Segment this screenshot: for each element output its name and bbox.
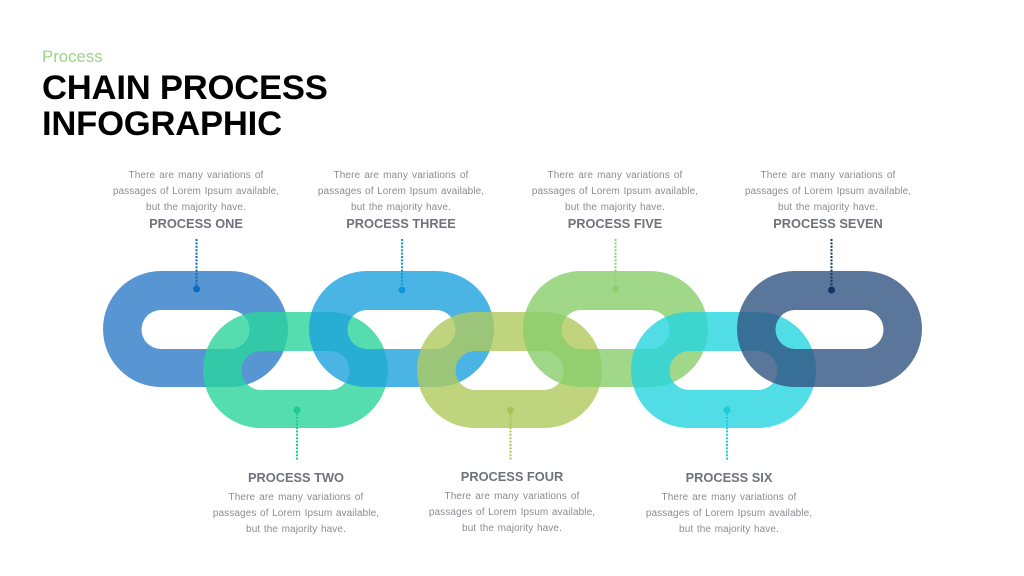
text: process seven — [745, 170, 911, 231]
text: process six: There are many variations of — [662, 492, 796, 503]
text: process three: passages of Lorem Ipsum available, — [318, 186, 484, 197]
text: process seven: PROCESS SEVEN — [773, 216, 883, 231]
text: process two: There are many variations of — [229, 492, 363, 503]
link 2 — [203, 312, 388, 428]
text: process one: There are many variations of — [129, 170, 263, 181]
link 1 — [103, 271, 288, 387]
text: process two: but the majority have. — [246, 524, 346, 535]
text: process six: PROCESS SIX — [686, 470, 772, 485]
title: INFOGRAPHIC — [42, 105, 282, 143]
text: process three: but the majority have. — [351, 202, 451, 213]
text: process one: passages of Lorem Ipsum available, — [113, 186, 279, 197]
connector 4 — [507, 406, 514, 460]
text: process two — [213, 470, 379, 535]
text: process one: PROCESS ONE — [149, 216, 243, 231]
text: process two: PROCESS TWO — [248, 470, 344, 485]
text: process five: but the majority have. — [565, 202, 665, 213]
title — [42, 69, 328, 143]
text: process four: PROCESS FOUR — [461, 469, 563, 484]
text: process three — [318, 170, 484, 231]
text: process six: passages of Lorem Ipsum available, — [646, 508, 812, 519]
text: process seven: There are many variations of — [761, 170, 895, 181]
text: process one: but the majority have. — [146, 202, 246, 213]
link 3 — [309, 271, 494, 387]
text: process one — [113, 170, 279, 231]
text: process six — [646, 470, 812, 535]
text: process seven: but the majority have. — [778, 202, 878, 213]
text: process two: passages of Lorem Ipsum available, — [213, 508, 379, 519]
link 5 — [523, 271, 708, 387]
text: process four — [429, 469, 595, 534]
text: process six: but the majority have. — [679, 524, 779, 535]
text: process five: passages of Lorem Ipsum available, — [532, 186, 698, 197]
text: process five: There are many variations of — [548, 170, 682, 181]
connector 5 — [612, 239, 619, 292]
title: CHAIN PROCESS — [42, 69, 328, 107]
text: process four: passages of Lorem Ipsum available, — [429, 507, 595, 518]
connector 1 — [193, 239, 200, 292]
text: process five: PROCESS FIVE — [568, 216, 662, 231]
link 4 — [417, 312, 602, 428]
text: process three: There are many variations of — [334, 170, 468, 181]
text: process five — [532, 170, 698, 231]
eyebrow: Process: Process — [42, 47, 103, 66]
text: process three: PROCESS THREE — [346, 216, 456, 231]
connector 6 — [724, 406, 730, 460]
connector 3 — [398, 239, 406, 294]
link 6 — [631, 312, 816, 428]
text: process four: There are many variations of — [445, 491, 579, 502]
connector 7 — [828, 239, 835, 294]
text: process seven: passages of Lorem Ipsum available, — [745, 186, 911, 197]
text: process four: but the majority have. — [462, 523, 562, 534]
link 7 — [737, 271, 922, 387]
connector 2 — [294, 406, 300, 460]
